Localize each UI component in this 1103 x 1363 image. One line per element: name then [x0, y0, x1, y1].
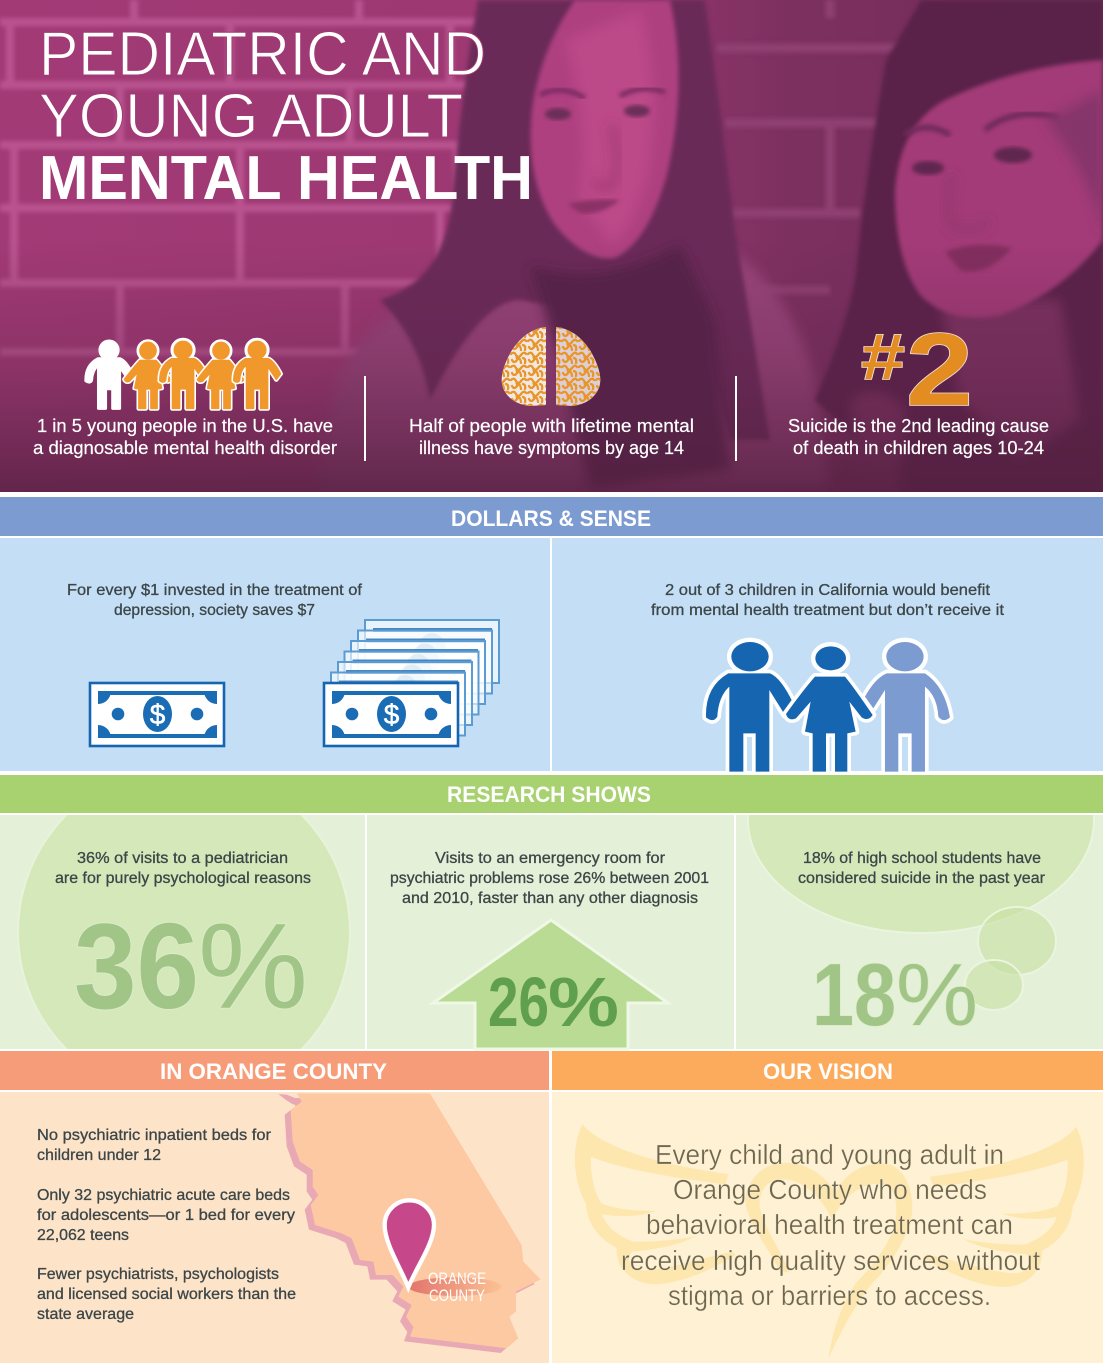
panel: research 26 percent — [367, 815, 734, 1049]
text block: vision statement: stigma or barriers to access. — [668, 1280, 991, 1311]
stat: half of people — [409, 327, 694, 458]
panel: dollars right — [552, 538, 1103, 772]
heading bar: dollars and sense — [0, 497, 1103, 536]
map label: ORANGE — [428, 1269, 486, 1288]
right woman: hair — [815, 0, 1103, 492]
panel: research 18 percent — [736, 815, 1103, 1049]
panel: research 36 percent — [0, 815, 365, 1049]
text block: vision statement: behavioral health treatment can — [646, 1209, 1013, 1240]
panel: research 36 percent: are for purely psychological reasons — [55, 870, 311, 887]
text block: vision statement: Orange County who needs — [673, 1174, 987, 1205]
text block: vision statement: receive high quality services without — [621, 1245, 1040, 1276]
panel: research 26 percent: and 2010, faster than any other diagnosis — [402, 890, 698, 907]
heading bar: our vision: OUR VISION — [763, 1059, 893, 1084]
thought bubble — [749, 815, 1093, 1009]
heading bar: dollars and sense: DOLLARS & SENSE — [451, 506, 651, 531]
panel: research 26 percent: Visits to an emergency room for — [435, 850, 666, 867]
icon: one dollar bill: $ — [150, 699, 166, 730]
panel: dollars left: depression, society saves $7 — [114, 602, 315, 619]
panel: dollars left: For every $1 invested in the treatment of — [67, 582, 363, 599]
right woman: neck and hand — [850, 300, 1080, 492]
text block: county facts — [37, 1127, 296, 1323]
heading bar: research shows — [0, 775, 1103, 813]
big number 36%: 36 — [74, 898, 199, 1034]
stat: 1 in 5 — [33, 340, 337, 458]
left woman: scarf — [530, 245, 730, 490]
stat: #2: Suicide is the 2nd leading cause — [788, 416, 1049, 436]
heading bar: in orange county — [0, 1051, 549, 1090]
map label: COUNTY — [429, 1286, 485, 1305]
big number 26%: 26 — [488, 963, 549, 1041]
heading bar: our vision — [552, 1051, 1103, 1090]
big number 18%: 18 — [812, 945, 896, 1044]
big number 18%: % — [896, 945, 978, 1044]
panel: our vision — [552, 1092, 1103, 1363]
text block: county facts: children under 12 — [37, 1147, 161, 1164]
text block: vision statement — [621, 1139, 1040, 1311]
panel: dollars right: 2 out of 3 children in California would benefit — [665, 582, 991, 599]
big number 26%: % — [548, 963, 619, 1041]
icon: number two: 2 — [906, 312, 973, 427]
icon: three people — [706, 641, 950, 772]
heading bar: in orange county: IN ORANGE COUNTY — [160, 1059, 387, 1084]
icon: stack of seven bills: $ — [384, 699, 400, 730]
text block: county facts: Fewer psychiatrists, psychologists — [37, 1266, 279, 1283]
left woman: body — [348, 258, 820, 474]
title: PEDIATRIC AND — [39, 20, 486, 89]
panel: orange county — [0, 1092, 549, 1363]
map of California — [278, 1093, 541, 1353]
text block: county facts: 22,062 teens — [37, 1227, 129, 1244]
text block: county facts: for adolescents—or 1 bed for every — [37, 1207, 295, 1224]
icon: winged heart — [575, 1124, 1084, 1358]
panel: research 26 percent: psychiatric problems rose 26% between 2001 — [390, 870, 709, 887]
big number 36% — [74, 898, 308, 1034]
hero bottom fade — [0, 276, 1103, 492]
icon: stack of seven bills — [324, 620, 499, 746]
heading bar: research shows: RESEARCH SHOWS — [447, 782, 651, 807]
brick wall — [0, 0, 915, 352]
panel: dollars left — [0, 538, 550, 771]
icon: number two — [861, 312, 973, 427]
big number 36%: % — [198, 898, 308, 1034]
arrow — [433, 920, 668, 1049]
stat: half of people: illness have symptoms by age 14 — [419, 438, 684, 458]
hero photo panel — [0, 0, 1103, 492]
stat: #2: of death in children ages 10-24 — [793, 438, 1044, 458]
title: MENTAL HEALTH — [39, 144, 533, 213]
text block: vision statement: Every child and young adult in — [655, 1139, 1004, 1170]
left woman: hair — [380, 0, 770, 440]
stat: 1 in 5: a diagnosable mental health disorder — [33, 438, 337, 458]
map pin — [385, 1200, 434, 1287]
text block: county facts: state average — [37, 1306, 134, 1323]
title — [39, 20, 533, 213]
big number 18% — [812, 945, 978, 1044]
big number 26% — [488, 963, 619, 1041]
icon: brain — [502, 327, 600, 406]
panel: research 18 percent: considered suicide in the past year — [798, 870, 1046, 887]
left woman: face — [531, 0, 679, 258]
panel: dollars right: from mental health treatment but don’t receive it — [651, 602, 1005, 619]
right woman: face — [895, 60, 1103, 318]
panel: research 18 percent: 18% of high school students have — [803, 850, 1041, 867]
icon: number two: # — [861, 320, 905, 393]
map label — [428, 1269, 486, 1305]
text block: county facts: No psychiatric inpatient beds for — [37, 1127, 272, 1144]
stat: #2 — [788, 312, 1049, 458]
stat: half of people: Half of people with lifetime mental — [409, 416, 694, 436]
icon: one dollar bill — [90, 683, 224, 746]
text block: county facts: and licensed social workers than the — [37, 1286, 296, 1303]
title: YOUNG ADULT — [39, 82, 463, 151]
icon: five people — [86, 340, 281, 409]
panel: research 36 percent: 36% of visits to a pediatrician — [77, 850, 288, 867]
text block: county facts: Only 32 psychiatric acute care beds — [37, 1187, 290, 1204]
stat: 1 in 5: 1 in 5 young people in the U.S. have — [37, 416, 333, 436]
